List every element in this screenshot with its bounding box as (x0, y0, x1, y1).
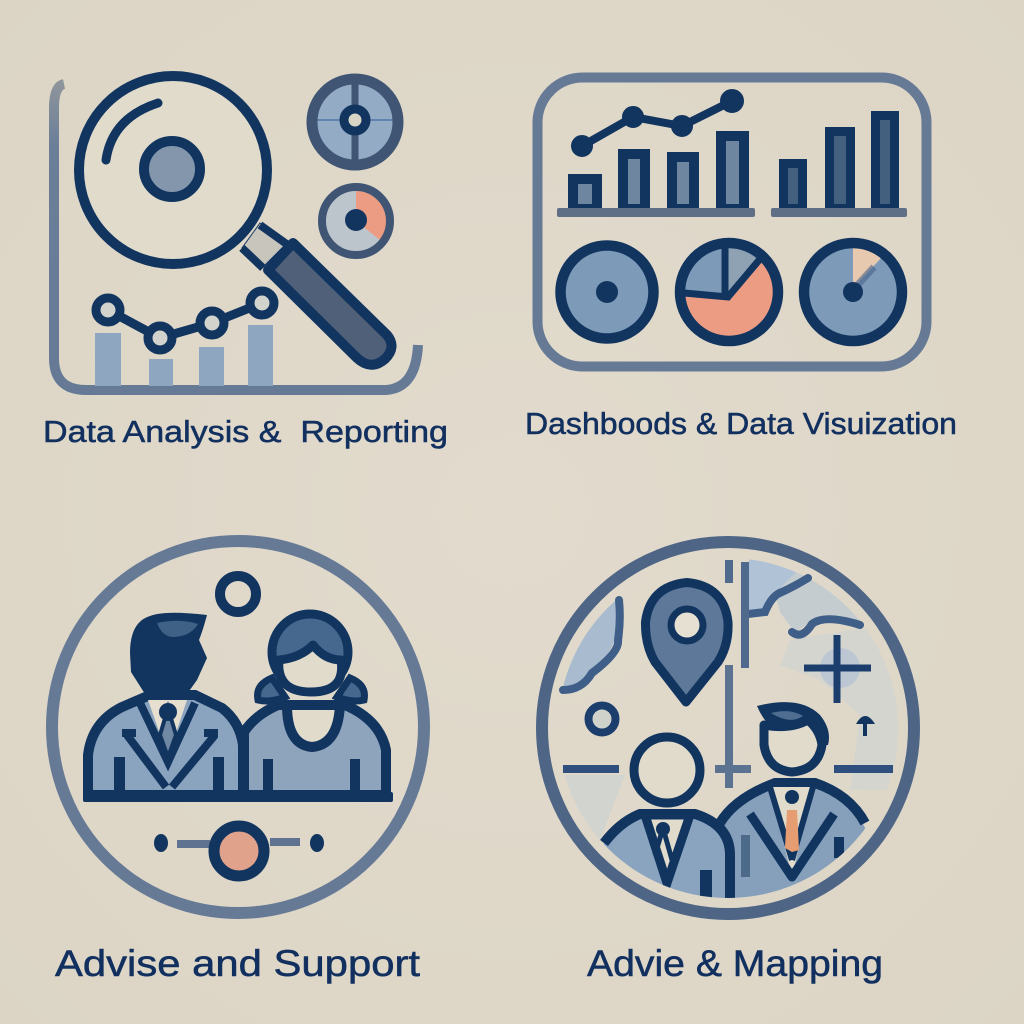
label: Dashboods & Data Visuization (525, 406, 957, 441)
icon: woman (244, 614, 386, 795)
label: Advise and Support (55, 943, 421, 984)
table line (83, 792, 393, 802)
bar chart right (784, 116, 894, 208)
icon: man (88, 613, 243, 795)
pie chart middle (680, 243, 778, 341)
icon: small circle (220, 576, 256, 612)
chart baselines (557, 208, 907, 217)
panel ring (52, 541, 424, 913)
icon: small location (588, 706, 616, 732)
icon: target dial (312, 78, 398, 166)
bar chart left (573, 136, 744, 209)
panel: data analysis and reporting (43, 76, 448, 449)
icon: magnifying glass (79, 76, 392, 365)
label: Data Analysis & Reporting (43, 414, 448, 449)
icon: orange dial (322, 187, 390, 255)
grid lines (563, 560, 893, 788)
donut chart left (560, 246, 654, 338)
icon: slider (154, 826, 324, 876)
map shading (563, 560, 898, 840)
line chart (96, 291, 274, 350)
panel frame (538, 78, 926, 366)
map coast lines (563, 578, 860, 690)
icon: small marker (856, 716, 875, 736)
gauge chart right (804, 243, 902, 341)
panel: advice and support (52, 541, 424, 984)
icon: map pin (645, 582, 728, 702)
head: person right (757, 702, 829, 772)
icon: person right (720, 783, 866, 905)
line chart (575, 93, 740, 153)
panel: dashboards and data visualization (525, 78, 957, 441)
panel ring (542, 542, 914, 914)
panel: advice and mapping (542, 542, 914, 984)
panel frame (54, 84, 418, 390)
icon: person left (600, 737, 730, 905)
label: Advie & Mapping (587, 943, 883, 984)
bar chart (95, 325, 273, 386)
